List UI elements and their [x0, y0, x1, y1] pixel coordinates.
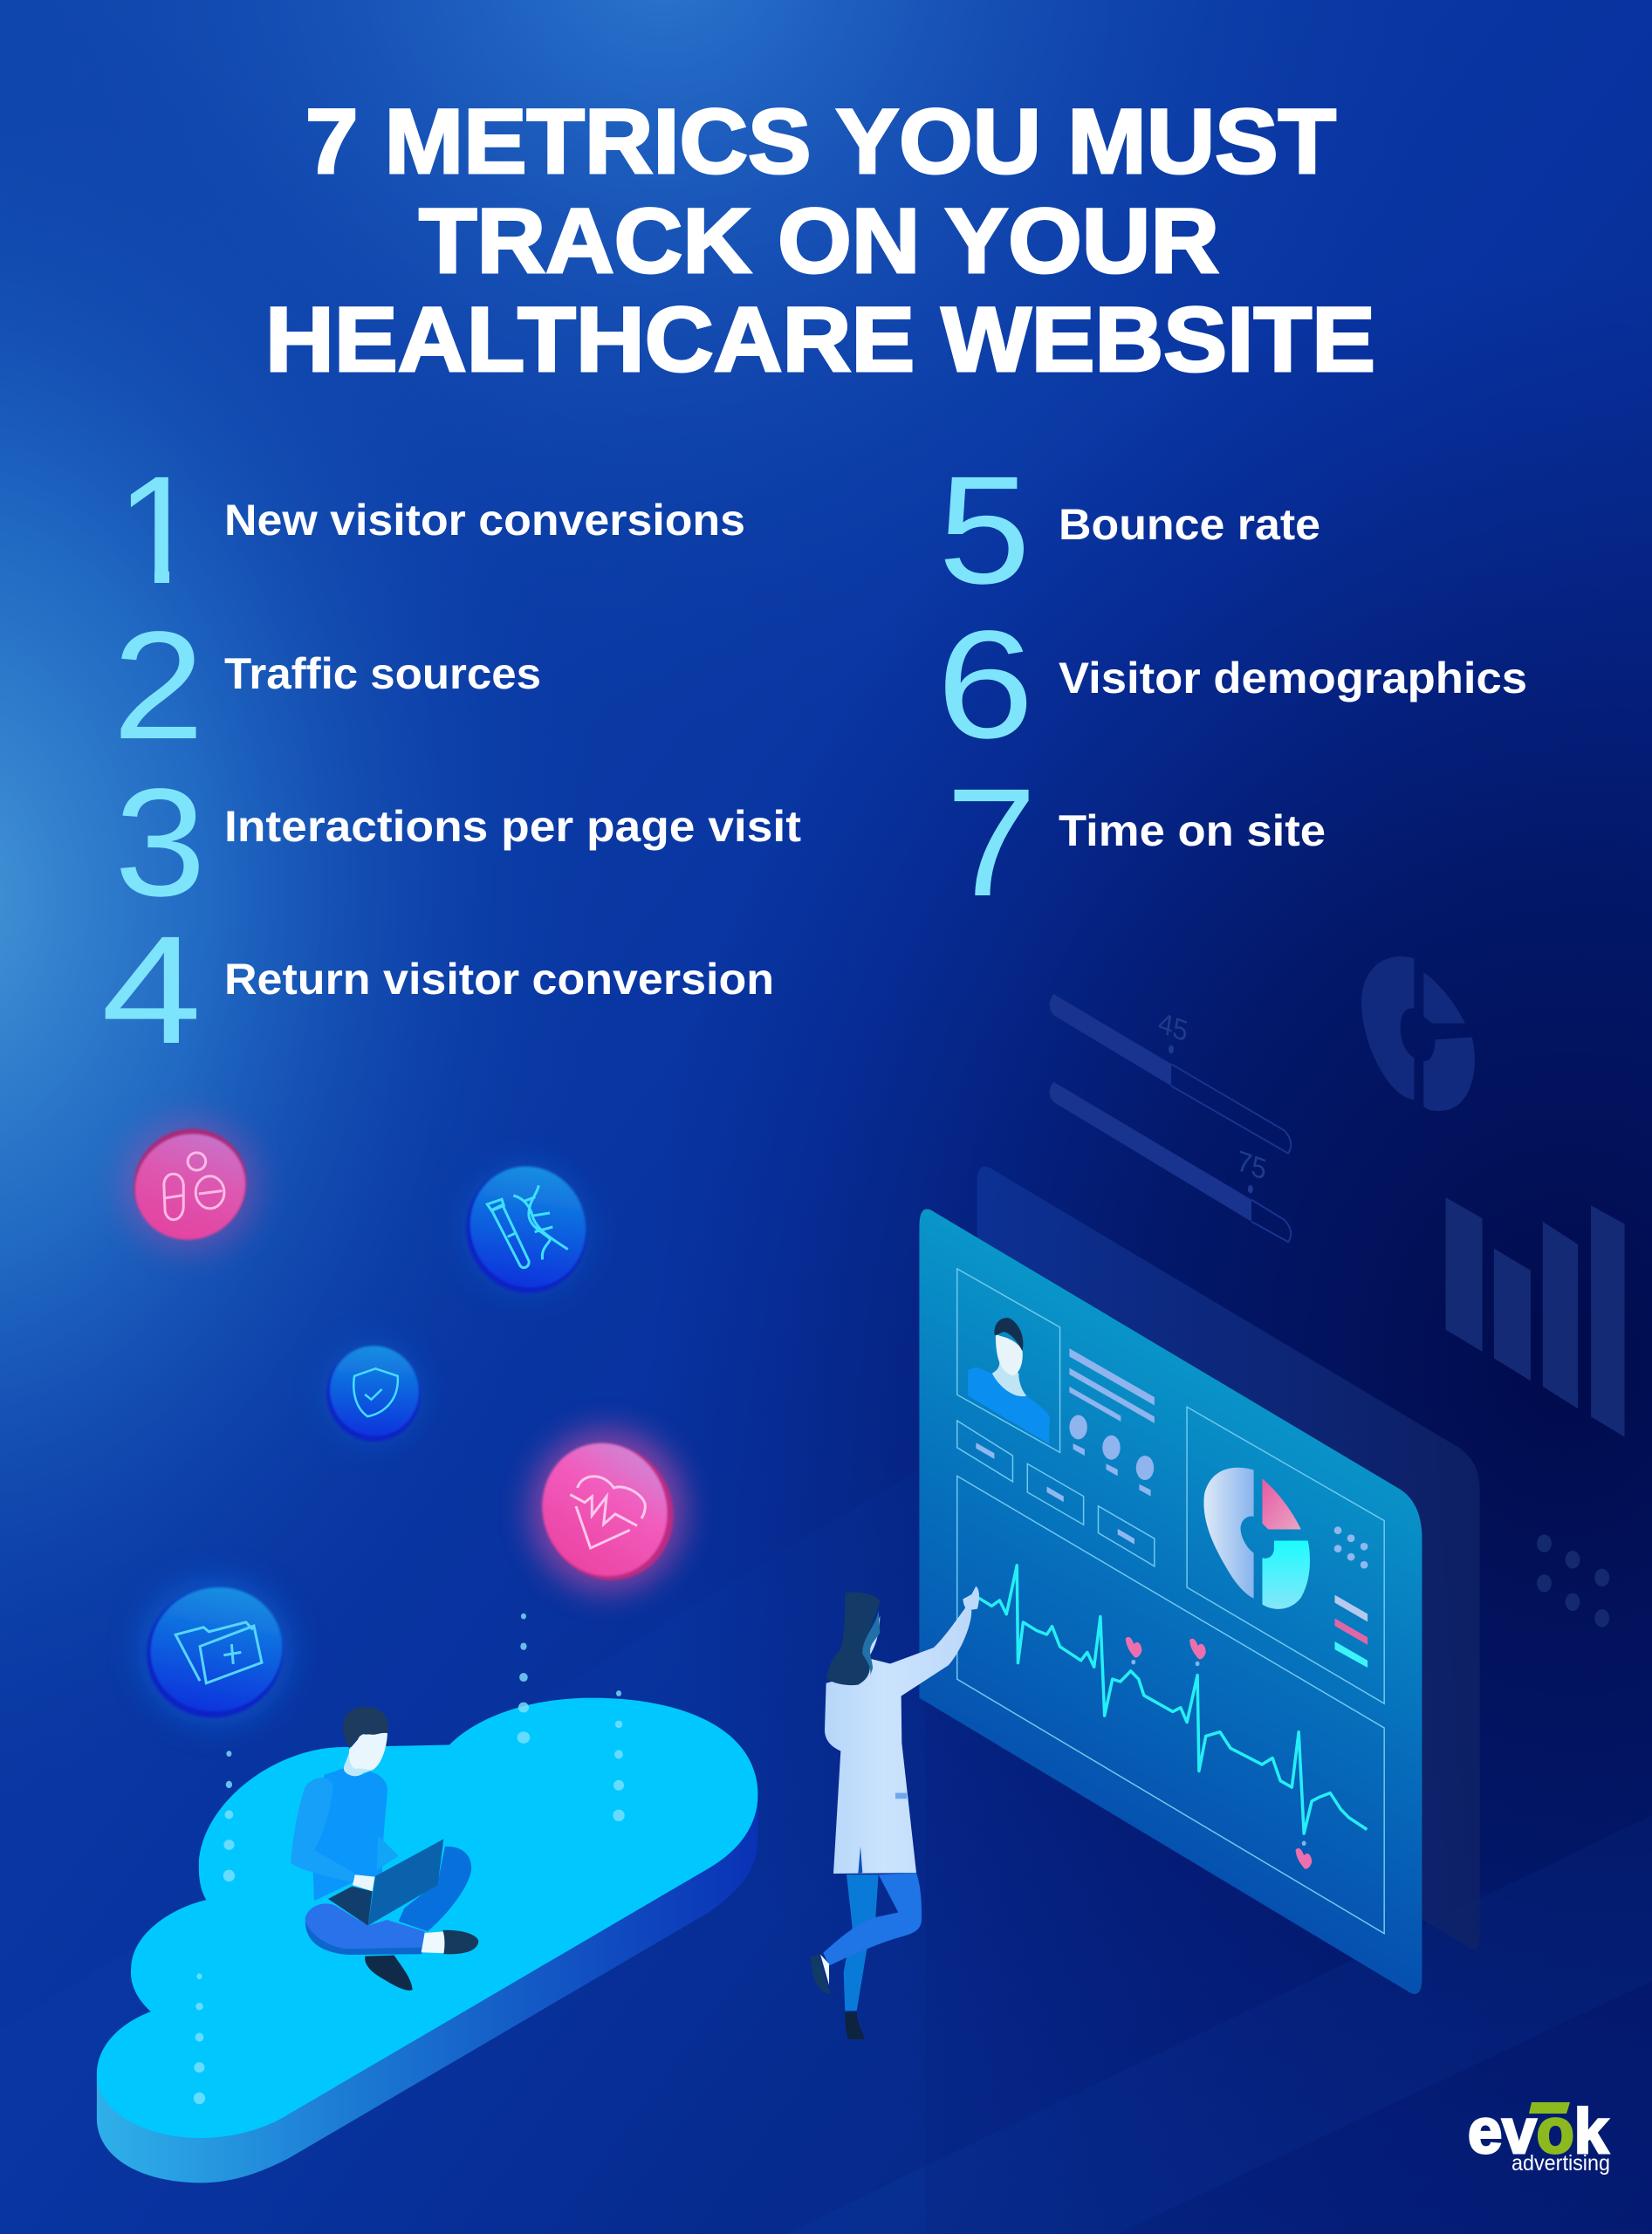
metric 3: [114, 757, 801, 929]
metric 2: 2: [113, 600, 204, 771]
ghost slider 45: [1050, 994, 1291, 1154]
orb: medical folder: [133, 1573, 297, 1733]
ghost slider 75: 75: [1235, 1144, 1269, 1186]
man with laptop: [291, 1707, 478, 1991]
dashboard screen: [919, 1210, 1422, 1994]
head: [343, 1707, 388, 1776]
metric 6: 6: [936, 600, 1034, 771]
metric 1: [116, 445, 745, 616]
light dots: [194, 1614, 625, 2104]
title: [265, 91, 1375, 391]
metric 1: 1: [116, 445, 202, 616]
metric 4: [101, 905, 774, 1076]
metric 2: [113, 600, 541, 771]
shoes: [810, 1955, 865, 2039]
metric 3: Interactions per page visit: [224, 802, 801, 851]
metric 4: Return visitor conversion: [224, 955, 774, 1004]
ghost dots: [1537, 1534, 1609, 1628]
title: HEALTHCARE WEBSITE: [265, 289, 1375, 391]
orb: DNA and test tube: [449, 1150, 604, 1310]
metric 6: [936, 600, 1527, 771]
stat circles: [1069, 1415, 1154, 1497]
front leg: [305, 1903, 425, 1955]
hair: [826, 1593, 880, 1685]
shoes: [365, 1930, 478, 1991]
doctor figure: [810, 1586, 979, 2039]
metric 6: Visitor demographics: [1059, 654, 1527, 702]
ECG line: [978, 1566, 1367, 1833]
lab coat: [825, 1586, 979, 1874]
profile portrait: [968, 1318, 1050, 1444]
ghost slider 75: [1050, 1082, 1291, 1242]
evok advertising logo: evok: [1468, 2097, 1609, 2167]
back panel: [977, 1167, 1480, 1950]
laptop: [328, 1839, 443, 1926]
pie chart: [1203, 1468, 1310, 1609]
info lines: [1069, 1348, 1155, 1423]
metric 7: [946, 757, 1326, 929]
metric 3: 3: [114, 757, 206, 929]
ghost bar chart: [1446, 1197, 1625, 1437]
title: TRACK ON YOUR: [419, 190, 1219, 292]
far leg: [844, 1874, 879, 2011]
orb: pills: [116, 1110, 264, 1257]
metric 2: Traffic sources: [224, 649, 541, 698]
metric 4: 4: [101, 905, 202, 1076]
ghost dashboard elements: [977, 956, 1625, 1950]
hearts: [1126, 1637, 1312, 1869]
metric 7: Time on site: [1059, 806, 1326, 855]
metric 7: 7: [946, 757, 1037, 929]
orb: shield: [312, 1331, 435, 1456]
ghost slider 45: 45: [1156, 1006, 1189, 1048]
title: 7 METRICS YOU MUST: [305, 91, 1336, 193]
torso: [312, 1768, 387, 1901]
evok advertising logo: advertising: [1511, 2151, 1610, 2176]
far leg: [399, 1847, 471, 1931]
chart frames: [957, 1269, 1384, 1934]
metric 5: Bounce rate: [1059, 500, 1320, 549]
arm: [377, 1835, 399, 1870]
button labels: [976, 1443, 1134, 1545]
orb: heart: [524, 1425, 692, 1598]
metric 5: 5: [938, 445, 1031, 616]
bent leg: [823, 1873, 922, 1965]
ghost pie chart: [1361, 956, 1475, 1111]
metric 1: New visitor conversions: [224, 496, 745, 545]
pie legend: [1334, 1526, 1368, 1668]
cloud platform: [97, 1614, 757, 2183]
screen profile and pie chart details: [968, 1318, 1368, 1668]
metric 5: [938, 445, 1320, 616]
